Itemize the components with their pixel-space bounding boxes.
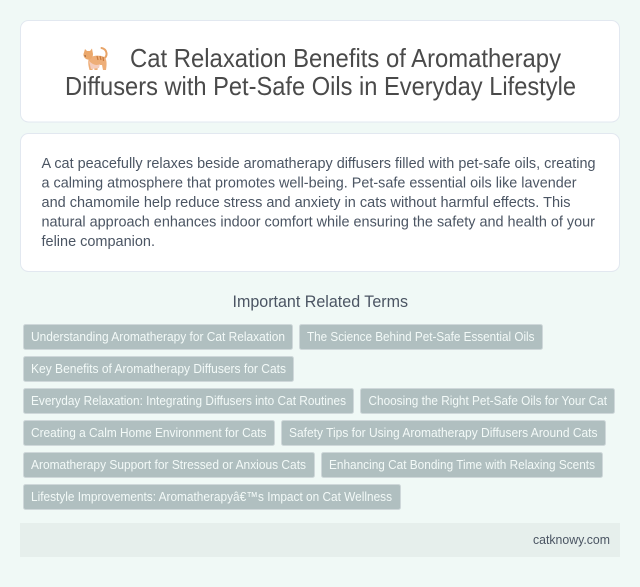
panel: description	[20, 134, 620, 272]
description text	[42, 155, 596, 250]
tag	[24, 324, 292, 350]
title panel	[20, 20, 620, 122]
tag	[360, 388, 614, 414]
description text: natural approach enhances indoor comfort while ensuring the safety and health of your	[42, 214, 595, 230]
description text: feline companion.	[42, 233, 155, 250]
tag: The Science Behind Pet-Safe Essential Oils	[307, 329, 535, 344]
tag	[24, 452, 314, 478]
tag: Everyday Relaxation: Integrating Diffusers into Cat Routines	[31, 393, 346, 408]
tag	[24, 484, 400, 510]
tag	[24, 356, 294, 382]
title text: Cat Relaxation Benefits of Aromatherapy	[130, 43, 561, 73]
tag list	[24, 324, 614, 510]
icon: cat	[83, 48, 107, 70]
tag: Creating a Calm Home Environment for Cats	[31, 425, 267, 440]
description text: a calming atmosphere that promotes well-being. Pet-safe essential oils like lavender	[42, 174, 576, 192]
tag: Aromatherapy Support for Stressed or Anxious Cats	[31, 457, 306, 472]
title text	[65, 43, 576, 101]
heading: important related terms: Important Related Terms	[232, 293, 408, 311]
tag: Safety Tips for Using Aromatherapy Diffusers Around Cats	[289, 425, 598, 440]
footer	[20, 523, 620, 557]
tag	[24, 388, 354, 414]
footer text: catknowy.com	[533, 532, 610, 547]
tag	[24, 420, 274, 446]
description text: and chamomile help reduce stress and anxiety in cats without harmful effects. This	[42, 194, 570, 211]
description text: A cat peacefully relaxes beside aromatherapy diffusers filled with pet-safe oils, creating	[42, 155, 596, 172]
title text: Diffusers with Pet-Safe Oils in Everyday Lifestyle	[65, 71, 576, 101]
tag: Enhancing Cat Bonding Time with Relaxing Scents	[329, 457, 595, 472]
tag: Key Benefits of Aromatherapy Diffusers for Cats	[31, 361, 286, 376]
tag	[322, 452, 602, 478]
tag: Understanding Aromatherapy for Cat Relaxation	[31, 329, 285, 344]
tag	[282, 420, 606, 446]
tag: Choosing the Right Pet-Safe Oils for Your Cat	[368, 393, 607, 408]
tag	[300, 324, 542, 350]
tag: Lifestyle Improvements: Aromatherapyâ€™s Impact on Cat Wellness	[31, 489, 392, 504]
